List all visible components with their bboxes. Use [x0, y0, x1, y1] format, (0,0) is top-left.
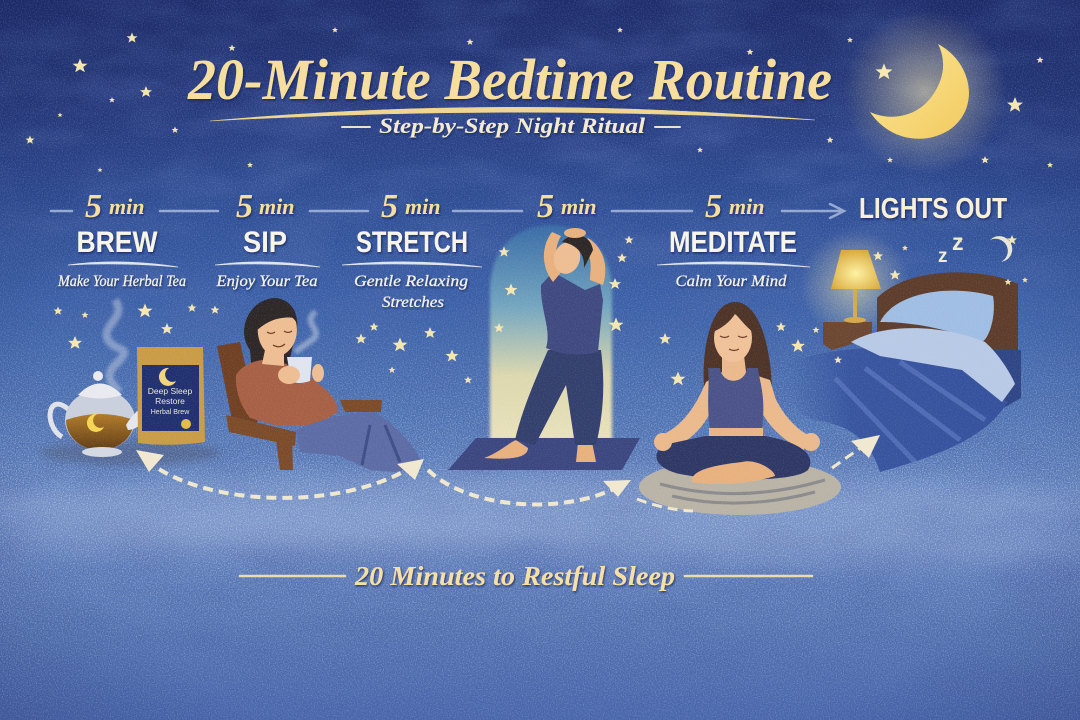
step 4 time label: min: [561, 194, 596, 219]
arrow: chair to mat: [428, 470, 620, 504]
zzz: z: [938, 246, 948, 267]
cushion stripes: [660, 480, 825, 503]
hands: [278, 366, 300, 384]
subtitle dashes: [342, 126, 680, 128]
neck and shoulders: [706, 355, 776, 400]
figure: meditating woman on cushion: [639, 302, 841, 515]
footer lines: [240, 575, 812, 577]
chair seat frame and legs: [226, 400, 382, 470]
figure: standing side stretch under glowing arch: [448, 225, 640, 470]
closed eyes and smile: [267, 331, 292, 347]
timeline connector lines: [51, 204, 844, 218]
icon: teapot with steam and herbal tea bag: [40, 300, 220, 465]
bag label: [148, 386, 192, 416]
title underline swoosh: [210, 107, 815, 121]
neck: [262, 350, 284, 366]
hair back: [244, 298, 297, 380]
step 3 label: stretch: Gentle Relaxing: [354, 273, 468, 290]
subtitle: Step-by-Step Night Ritual: [379, 113, 646, 138]
pillow: [880, 291, 994, 342]
step 3 label: stretch: [342, 188, 482, 311]
hair parting: [713, 308, 753, 332]
bag flower: [181, 419, 191, 429]
blanket over legs: [296, 412, 422, 472]
arrow: cushion to bed: [832, 443, 868, 468]
pants: [515, 350, 603, 445]
teapot body: [65, 390, 135, 450]
step 2 label: sip: min: [259, 194, 294, 219]
step 1 label: brew: Make Your Herbal Tea: [57, 273, 186, 290]
step 5 label: meditate: 5: [705, 188, 722, 225]
teapot handle: [50, 404, 74, 437]
step 2 label: sip: [215, 188, 320, 290]
step 2 label: sip: 5: [236, 188, 253, 225]
bag label: Restore: [155, 396, 185, 406]
step 3 label: stretch: Stretches: [382, 294, 444, 311]
stars around the meditation scene: [659, 322, 843, 385]
tea bag: [137, 347, 205, 445]
arch stars: [494, 236, 634, 332]
raised arms: [544, 232, 605, 285]
step 5 label: meditate: [657, 188, 810, 290]
spout: [126, 398, 149, 430]
bag label: Herbal Brew: [151, 409, 190, 416]
bag label: Deep Sleep: [148, 386, 192, 396]
scattered stars: [26, 27, 1053, 172]
arrow: bag to chair: [146, 460, 410, 498]
arrowheads: [136, 435, 880, 497]
mug: [287, 357, 312, 383]
sweater: [236, 360, 338, 425]
step 1 label: brew: min: [109, 194, 144, 219]
shirt: [541, 272, 603, 354]
moon and stars in tea: [87, 414, 104, 432]
title text: 20-Minute Bedtime Routine: [187, 47, 832, 112]
floor cushion: [639, 459, 841, 515]
step 2 label: sip: Enjoy Your Tea: [215, 273, 318, 290]
hair: [704, 302, 772, 395]
step 3 label: stretch: min: [405, 194, 440, 219]
blanket folds: [362, 425, 400, 465]
figure: woman sipping tea in chair: [217, 298, 422, 472]
step 5 label: meditate: MEDITATE: [669, 226, 797, 259]
small moon: [990, 236, 1012, 262]
arms: [662, 380, 808, 450]
tank top: [708, 368, 763, 430]
glowing arch: [490, 225, 612, 440]
headboard: [877, 272, 1018, 370]
title: [187, 47, 832, 138]
folded sheet: [851, 328, 1015, 402]
nightstand: [823, 322, 872, 350]
step 2 label: sip: SIP: [243, 226, 287, 259]
step 5 label: meditate: min: [729, 194, 764, 219]
hair fringe: [255, 312, 296, 332]
chair back: [217, 342, 258, 425]
blanket folds: [835, 362, 985, 462]
hair and hands: [562, 235, 593, 268]
mattress side: [985, 350, 1021, 410]
step 1 label: brew: [57, 188, 186, 290]
step 1 label: brew: 5: [85, 188, 102, 225]
step 4 time label: 5: [537, 188, 554, 225]
steam: [107, 300, 124, 392]
feet: [484, 440, 596, 462]
crescent moon with glow: [843, 10, 1007, 174]
dashed arrows between steps: [146, 443, 868, 511]
bag crescent: [159, 368, 176, 386]
crossed legs: [656, 436, 810, 480]
step 3 label: stretch: STRETCH: [356, 226, 468, 259]
head: [550, 239, 584, 277]
midriff: [709, 428, 763, 437]
hands on knees: [654, 433, 672, 451]
step 1 label: brew: BREW: [76, 226, 158, 259]
bedroom stars: [834, 235, 1028, 363]
second z: z: [952, 229, 964, 255]
footer text: 20 Minutes to Restful Sleep: [354, 561, 675, 591]
face: [258, 314, 297, 357]
face: [714, 314, 752, 362]
yoga mat: [448, 438, 640, 470]
table shadow: [40, 441, 220, 465]
teapot lid: [78, 384, 122, 398]
step 3 label: stretch: 5: [381, 188, 398, 225]
blanket: [788, 348, 1008, 472]
final step label: lights out: LIGHTS OUT: [859, 193, 1007, 225]
arrow: mat to cushion: [637, 499, 693, 511]
mug steam: [295, 312, 316, 352]
lamp: [831, 250, 881, 323]
stars around the brew and sip scene: [54, 304, 472, 383]
step 5 label: meditate: Calm Your Mind: [676, 273, 787, 290]
closed eyes and mouth: [720, 336, 747, 350]
step 4 time label: [537, 188, 596, 225]
crossed foot: [692, 461, 775, 484]
lamp glow: [800, 230, 910, 340]
teapot base: [82, 447, 122, 457]
bedroom scene: [788, 229, 1028, 472]
